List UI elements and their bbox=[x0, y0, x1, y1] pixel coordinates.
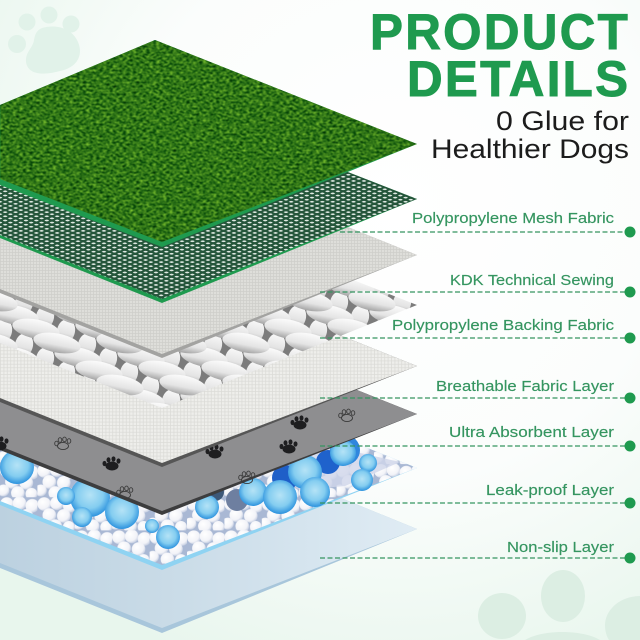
subtitle: Healthier Dogs bbox=[431, 134, 629, 164]
callout: Ultra Absorbent Layer bbox=[320, 425, 636, 452]
subtitle: 0 Glue for bbox=[496, 106, 629, 136]
title bbox=[370, 4, 628, 107]
layer: breathable fabric bbox=[0, 261, 417, 467]
icon: paw bottom-right bbox=[478, 570, 640, 640]
callout: Breathable Fabric Layer: Breathable Fabric Layer bbox=[436, 379, 614, 395]
blue water beads bbox=[0, 435, 400, 549]
layer: ultra absorbent pad bbox=[0, 309, 417, 515]
callout: Non-slip Layer: Non-slip Layer bbox=[507, 540, 614, 556]
layer: grass bbox=[0, 40, 417, 247]
title: DETAILS bbox=[407, 51, 628, 107]
callout: KDK Technical Sewing: KDK Technical Sewing bbox=[450, 273, 614, 289]
callout: Leak-proof Layer bbox=[320, 483, 636, 508]
callout: Breathable Fabric Layer bbox=[320, 379, 636, 404]
callout: Polypropylene Backing Fabric bbox=[320, 318, 636, 344]
callout: Polypropylene Backing Fabric: Polypropylene Backing Fabric bbox=[392, 318, 614, 334]
layer: mesh fabric bbox=[0, 97, 417, 303]
icon: paw top-left bbox=[8, 6, 80, 74]
paw prints bbox=[0, 409, 355, 499]
subtitle bbox=[431, 106, 629, 164]
callout: Ultra Absorbent Layer: Ultra Absorbent Layer bbox=[449, 425, 614, 441]
callout: Non-slip Layer bbox=[320, 540, 636, 564]
callout: Leak-proof Layer: Leak-proof Layer bbox=[486, 483, 614, 499]
callout: KDK Technical Sewing bbox=[320, 273, 636, 298]
title: PRODUCT bbox=[370, 4, 628, 60]
layer: KDK grey fabric bbox=[0, 149, 417, 358]
callout: Polypropylene Mesh Fabric bbox=[340, 211, 636, 238]
layer: woven backing bbox=[0, 202, 417, 408]
layer: non-slip bbox=[0, 422, 417, 633]
callout: Polypropylene Mesh Fabric: Polypropylene Mesh Fabric bbox=[412, 211, 614, 227]
layer: leak-proof beads bbox=[0, 362, 417, 570]
